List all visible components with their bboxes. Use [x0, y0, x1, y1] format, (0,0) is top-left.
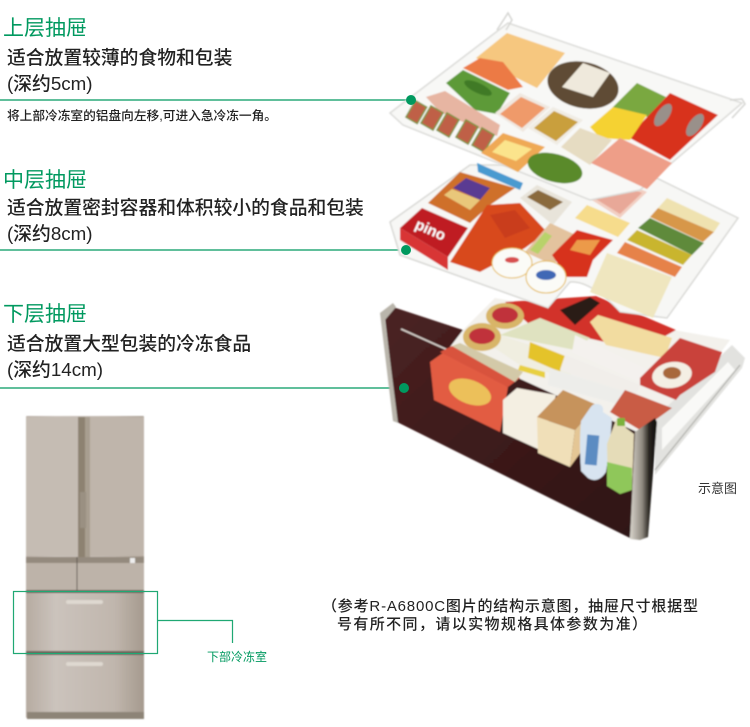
text block: middle drawer description: 适合放置密封容器和体积较小的食品和包装 [7, 197, 364, 218]
edamame [612, 83, 666, 117]
sauce container [520, 185, 572, 225]
salmon rolls [406, 101, 494, 152]
illustration: middle drawer [390, 163, 738, 318]
illustration: lower drawer [380, 296, 745, 540]
orange roast [450, 203, 547, 272]
base [27, 712, 144, 719]
bacon tray [573, 168, 647, 218]
callout label: 下部冷冻室 [207, 649, 267, 664]
lower freezer drawer [26, 651, 144, 712]
sausages [428, 172, 515, 223]
green vegetables [446, 70, 510, 114]
bottle: green tea [607, 420, 634, 492]
leader line: middle drawer [0, 249, 406, 251]
centre panel [78, 417, 85, 557]
yoghurt tubs [492, 248, 532, 278]
illustration: refrigerator [26, 416, 144, 719]
right door [90, 417, 144, 556]
yellow tray [575, 205, 630, 237]
pork [591, 138, 672, 189]
control panel [80, 492, 86, 528]
illustration: middle drawer: pino [412, 216, 448, 245]
drawer side rail [655, 345, 745, 475]
long packs [617, 242, 682, 277]
leader line: lower drawer [0, 387, 404, 389]
pino box [400, 208, 468, 257]
yellow egg [590, 107, 647, 140]
mushroom tray [543, 55, 623, 115]
text block: lower drawer description [7, 333, 251, 380]
marker: upper drawer [406, 95, 416, 105]
footnote: 号有所不同，请以实物规格具体参数为准） [337, 615, 647, 633]
red box [552, 230, 613, 277]
dark front panel [385, 307, 637, 538]
marker: middle drawer [401, 245, 411, 255]
bread loaf 2 [537, 390, 597, 430]
illustration: upper drawer [390, 13, 745, 200]
pizza [481, 133, 545, 172]
salmon [463, 58, 523, 90]
text block: lower drawer description: (深约14cm) [7, 359, 103, 380]
upper freezer drawer [26, 590, 144, 651]
small trays [495, 93, 550, 132]
ice cream tubs [486, 303, 524, 329]
footnote: （参考R-A6800C图片的结构示意图，抽屉尺寸根据型 [322, 597, 698, 615]
note: upper drawer: 将上部冷冻室的铝盘向左移,可进入急冷冻一角。 [7, 108, 277, 123]
heading: middle drawer: 中层抽屉 [3, 169, 87, 192]
bottle: blue drink [580, 404, 612, 480]
left door [26, 417, 77, 556]
drawer handle [401, 329, 450, 351]
text block: middle drawer description: (深约8cm) [7, 223, 93, 244]
fridge body [26, 416, 144, 718]
green vegetables 2 [524, 147, 586, 189]
pork belly [426, 91, 500, 136]
tray handles [497, 13, 745, 118]
handle indicator [130, 558, 135, 563]
marker: lower drawer [399, 383, 409, 393]
text block: upper drawer description: 适合放置较薄的食物和包装 [7, 47, 233, 68]
clear tray [390, 165, 738, 318]
rice pack [590, 253, 672, 318]
shumai [561, 128, 612, 165]
chicken package [430, 350, 508, 432]
blue pack [477, 163, 523, 190]
text block: lower drawer description: 适合放置大型包装的冷冻食品 [7, 333, 251, 354]
heading: lower drawer: 下层抽屉 [3, 303, 87, 326]
caption: schematic label: 示意图 [698, 481, 737, 496]
text block: upper drawer description [7, 47, 233, 94]
ice compartment row [26, 557, 144, 590]
callout line [158, 620, 232, 643]
leader line: upper drawer [0, 99, 411, 101]
drawer interior [450, 298, 730, 440]
orange rice pack [476, 33, 565, 88]
heading: upper drawer: 上层抽屉 [3, 17, 87, 40]
footnote [322, 597, 698, 633]
right silver rim [630, 418, 657, 540]
clear tray [390, 23, 742, 200]
bacon and greens [525, 223, 580, 265]
red packs [628, 93, 718, 160]
left silver rim [380, 303, 398, 423]
text block: upper drawer description: (深约5cm) [7, 73, 93, 94]
soup pack [640, 338, 722, 400]
highlight box: lower freezer [14, 592, 158, 654]
frozen packs at back [505, 296, 676, 350]
text block: middle drawer description [7, 197, 364, 244]
bread loaf 1 [503, 388, 556, 450]
